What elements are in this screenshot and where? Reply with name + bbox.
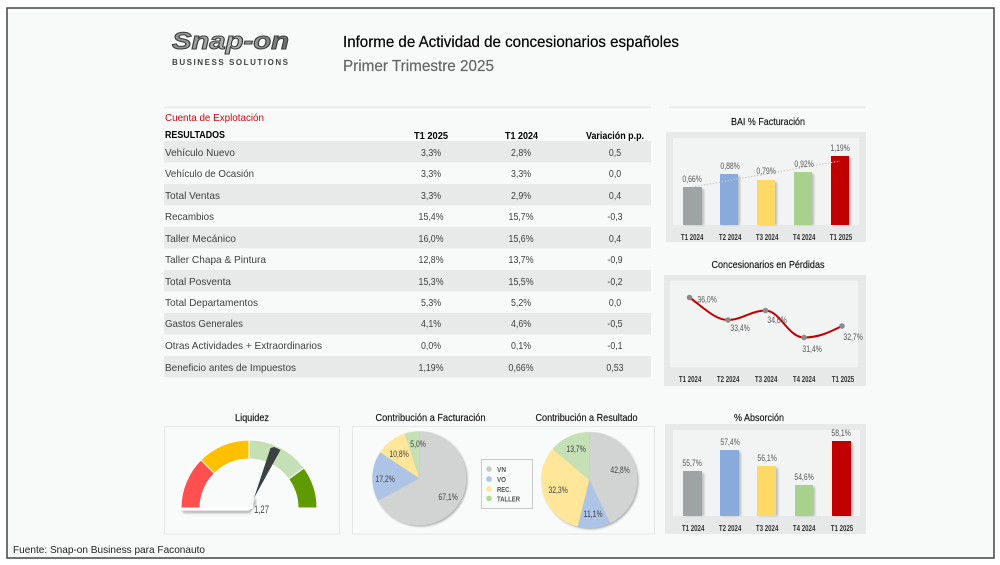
- row: Beneficio antes de Impuestos: Beneficio antes de Impuestos: [165, 362, 296, 374]
- row: Vehículo de Ocasión: 3,3%: [421, 168, 441, 180]
- legend: VN: [497, 465, 506, 474]
- line chart: Concesionarios en Pérdidas: 36,0%: [697, 294, 717, 305]
- bar chart: % Absorción: 57,4%: [720, 437, 740, 447]
- logo: Snap-on Business Solutions: Snap-on: [172, 28, 289, 55]
- row: Total Ventas: 2,9%: [511, 190, 531, 202]
- legend: [482, 460, 532, 508]
- pie chart: Contribución a Facturación: [372, 431, 468, 526]
- line chart: Concesionarios en Pérdidas: 32,7%: [843, 332, 863, 342]
- line chart: Concesionarios en Pérdidas: T4 2024: [793, 374, 816, 384]
- row: Taller Mecánico: 15,6%: [509, 233, 534, 245]
- row: Taller Mecánico: 16,0%: [419, 233, 444, 245]
- table header row: T1 2025: [414, 130, 448, 142]
- bar chart: BAI % Facturación: 0,79%: [756, 166, 776, 176]
- row: Taller Chapa & Pintura: [165, 254, 623, 266]
- row: Recambios: -0,3: [607, 211, 623, 223]
- legend: REC.: [497, 485, 511, 494]
- line chart: Concesionarios en Pérdidas: 33,4%: [730, 323, 750, 333]
- row: Vehículo Nuevo: [165, 147, 621, 159]
- row: Taller Mecánico: Taller Mecánico: [165, 233, 236, 245]
- row: Recambios: 15,4%: [419, 211, 444, 223]
- panel: results table: [164, 112, 651, 377]
- gauge: Liquidez: 1,27: [254, 504, 269, 516]
- row: Total Departamentos: 0,0: [609, 297, 622, 309]
- pie chart: Contribución a Resultado: [541, 432, 638, 529]
- table section heading: Cuenta de Explotación: [165, 112, 264, 124]
- row: Total Departamentos: [165, 297, 622, 309]
- bar chart: BAI % Facturación: 0,88%: [720, 161, 740, 171]
- row: Gastos Generales: -0,5: [607, 318, 623, 330]
- row: Taller Chapa & Pintura: 13,7%: [509, 254, 534, 266]
- row: Total Ventas: 0,4: [609, 190, 622, 202]
- row: Vehículo de Ocasión: 0,0: [609, 168, 622, 180]
- bar chart: % Absorción: T1 2024: [682, 523, 705, 533]
- line chart: Concesionarios en Pérdidas: T1 2025: [832, 374, 854, 384]
- pie chart: Contribución a Facturación: 5,0%: [410, 439, 426, 449]
- row: Otras Actividades + Extraordinarios: Otras Actividades + Extraordinarios: [165, 340, 322, 352]
- row: Taller Chapa & Pintura: Taller Chapa & Pintura: [165, 254, 266, 266]
- bar chart: % Absorción: 55,7%: [682, 458, 702, 468]
- row: Total Posventa: 15,3%: [419, 276, 444, 288]
- row: Total Posventa: Total Posventa: [165, 276, 231, 288]
- legend: VO: [497, 475, 506, 484]
- pie chart: Contribución a Facturación: 10,8%: [389, 449, 409, 459]
- bar chart: BAI % Facturación: 0,66%: [682, 174, 702, 184]
- row: Recambios: 15,7%: [509, 211, 534, 223]
- line chart: Concesionarios en Pérdidas: T3 2024: [755, 374, 778, 384]
- row: Gastos Generales: 4,1%: [421, 318, 441, 330]
- row: Otras Actividades + Extraordinarios: 0,1%: [511, 340, 531, 352]
- row: Taller Mecánico: 0,4: [609, 233, 622, 245]
- row: Beneficio antes de Impuestos: 1,19%: [419, 362, 444, 374]
- pie chart: Contribución a Facturación: 67,1%: [438, 492, 458, 502]
- panel: contribution pies: [352, 426, 654, 534]
- row: Taller Chapa & Pintura: -0,9: [607, 254, 623, 266]
- row: Vehículo Nuevo: 3,3%: [421, 147, 441, 159]
- pie chart: Contribución a Facturación: 17,2%: [375, 474, 395, 484]
- row: Vehículo de Ocasión: 3,3%: [511, 168, 531, 180]
- bar chart: BAI % Facturación: [666, 132, 866, 242]
- row: Otras Actividades + Extraordinarios: [165, 340, 623, 352]
- row: Gastos Generales: 4,6%: [511, 318, 531, 330]
- line chart: Concesionarios en Pérdidas: T1 2024: [679, 374, 702, 384]
- logo: Snap-on Business Solutions: [172, 28, 289, 67]
- table header row: Variación p.p.: [586, 130, 644, 142]
- line chart: Concesionarios en Pérdidas: 34,6%: [767, 315, 787, 325]
- line chart: Concesionarios en Pérdidas: [664, 275, 866, 386]
- row: Gastos Generales: [165, 318, 623, 330]
- row: Total Departamentos: 5,2%: [511, 297, 531, 309]
- row: Total Departamentos: 5,3%: [421, 297, 441, 309]
- pie chart: Contribución a Resultado: 13,7%: [566, 444, 586, 454]
- bar chart: BAI % Facturación: T2 2024: [719, 232, 742, 242]
- bar chart: BAI % Facturación: 1,19%: [830, 143, 850, 153]
- bar chart: % Absorción: T3 2024: [756, 523, 779, 533]
- row: Total Posventa: [165, 276, 623, 288]
- logo: Snap-on Business Solutions: BUSINESS SOLUTIONS: [172, 58, 289, 67]
- bar chart: BAI % Facturación: T1 2025: [830, 232, 852, 242]
- row: Taller Mecánico: [165, 233, 622, 245]
- bar chart: % Absorción: 54,6%: [794, 472, 814, 482]
- heading: Liquidez: Liquidez: [235, 412, 269, 424]
- line chart: Concesionarios en Pérdidas: T2 2024: [717, 374, 740, 384]
- heading: Concesionarios en Pérdidas: Concesionarios en Pérdidas: [712, 259, 824, 271]
- bar chart: % Absorción: T4 2024: [793, 523, 816, 533]
- row: Total Ventas: [165, 190, 622, 202]
- bar chart: % Absorción: [665, 424, 866, 534]
- bar chart: % Absorción: 56,1%: [757, 453, 777, 463]
- table header row: T1 2024: [505, 130, 538, 142]
- row: Recambios: [165, 211, 623, 223]
- row: Total Departamentos: Total Departamentos: [165, 297, 258, 309]
- bar chart: BAI % Facturación: T4 2024: [793, 232, 816, 242]
- row: Beneficio antes de Impuestos: [165, 362, 624, 374]
- row: Total Posventa: 15,5%: [509, 276, 534, 288]
- heading: % Absorción: % Absorción: [734, 412, 784, 424]
- bar chart: % Absorción: T1 2025: [831, 523, 853, 533]
- pie chart: Contribución a Resultado: 32,3%: [548, 485, 568, 495]
- row: Total Ventas: 3,3%: [421, 190, 441, 202]
- row: Beneficio antes de Impuestos: 0,66%: [509, 362, 534, 374]
- heading: BAI % Facturación: BAI % Facturación: [731, 116, 805, 128]
- row: Total Posventa: -0,2: [607, 276, 623, 288]
- bar chart: % Absorción: T2 2024: [719, 523, 742, 533]
- row: Gastos Generales: Gastos Generales: [165, 318, 243, 330]
- bar chart: BAI % Facturación: T3 2024: [756, 232, 779, 242]
- bar chart: BAI % Facturación: 0,92%: [794, 159, 814, 169]
- subtitle: Primer Trimestre 2025: [343, 58, 494, 75]
- gauge: Liquidez: [164, 426, 340, 534]
- source note: Fuente: Snap-on Business para Faconauto: [13, 544, 205, 556]
- row: Vehículo Nuevo: 0,5: [609, 147, 621, 159]
- row: Otras Actividades + Extraordinarios: 0,0%: [421, 340, 441, 352]
- row: Vehículo de Ocasión: Vehículo de Ocasión: [165, 168, 254, 180]
- row: Taller Chapa & Pintura: 12,8%: [419, 254, 444, 266]
- table header row: RESULTADOS: [165, 129, 225, 141]
- row: Vehículo de Ocasión: [165, 168, 622, 180]
- title: Informe de Actividad de concesionarios españoles: [343, 34, 679, 51]
- row: Vehículo Nuevo: Vehículo Nuevo: [165, 147, 235, 159]
- pie chart: Contribución a Resultado: 42,8%: [610, 465, 630, 475]
- heading: Contribución a Resultado: Contribución a Resultado: [536, 412, 638, 424]
- legend: TALLER: [497, 494, 520, 504]
- bar chart: % Absorción: 58,1%: [831, 428, 851, 438]
- row: Vehículo Nuevo: 2,8%: [511, 147, 531, 159]
- row: Recambios: Recambios: [165, 211, 214, 223]
- table header row: [165, 129, 644, 142]
- row: Otras Actividades + Extraordinarios: -0,1: [607, 340, 623, 352]
- bar chart: BAI % Facturación: T1 2024: [681, 232, 704, 242]
- row: Beneficio antes de Impuestos: 0,53: [606, 362, 624, 374]
- pie chart: Contribución a Resultado: 11,1%: [584, 509, 603, 519]
- row: Total Ventas: Total Ventas: [165, 190, 220, 202]
- line chart: Concesionarios en Pérdidas: 31,4%: [802, 344, 822, 354]
- heading: Contribución a Facturación: Contribución a Facturación: [376, 412, 486, 424]
